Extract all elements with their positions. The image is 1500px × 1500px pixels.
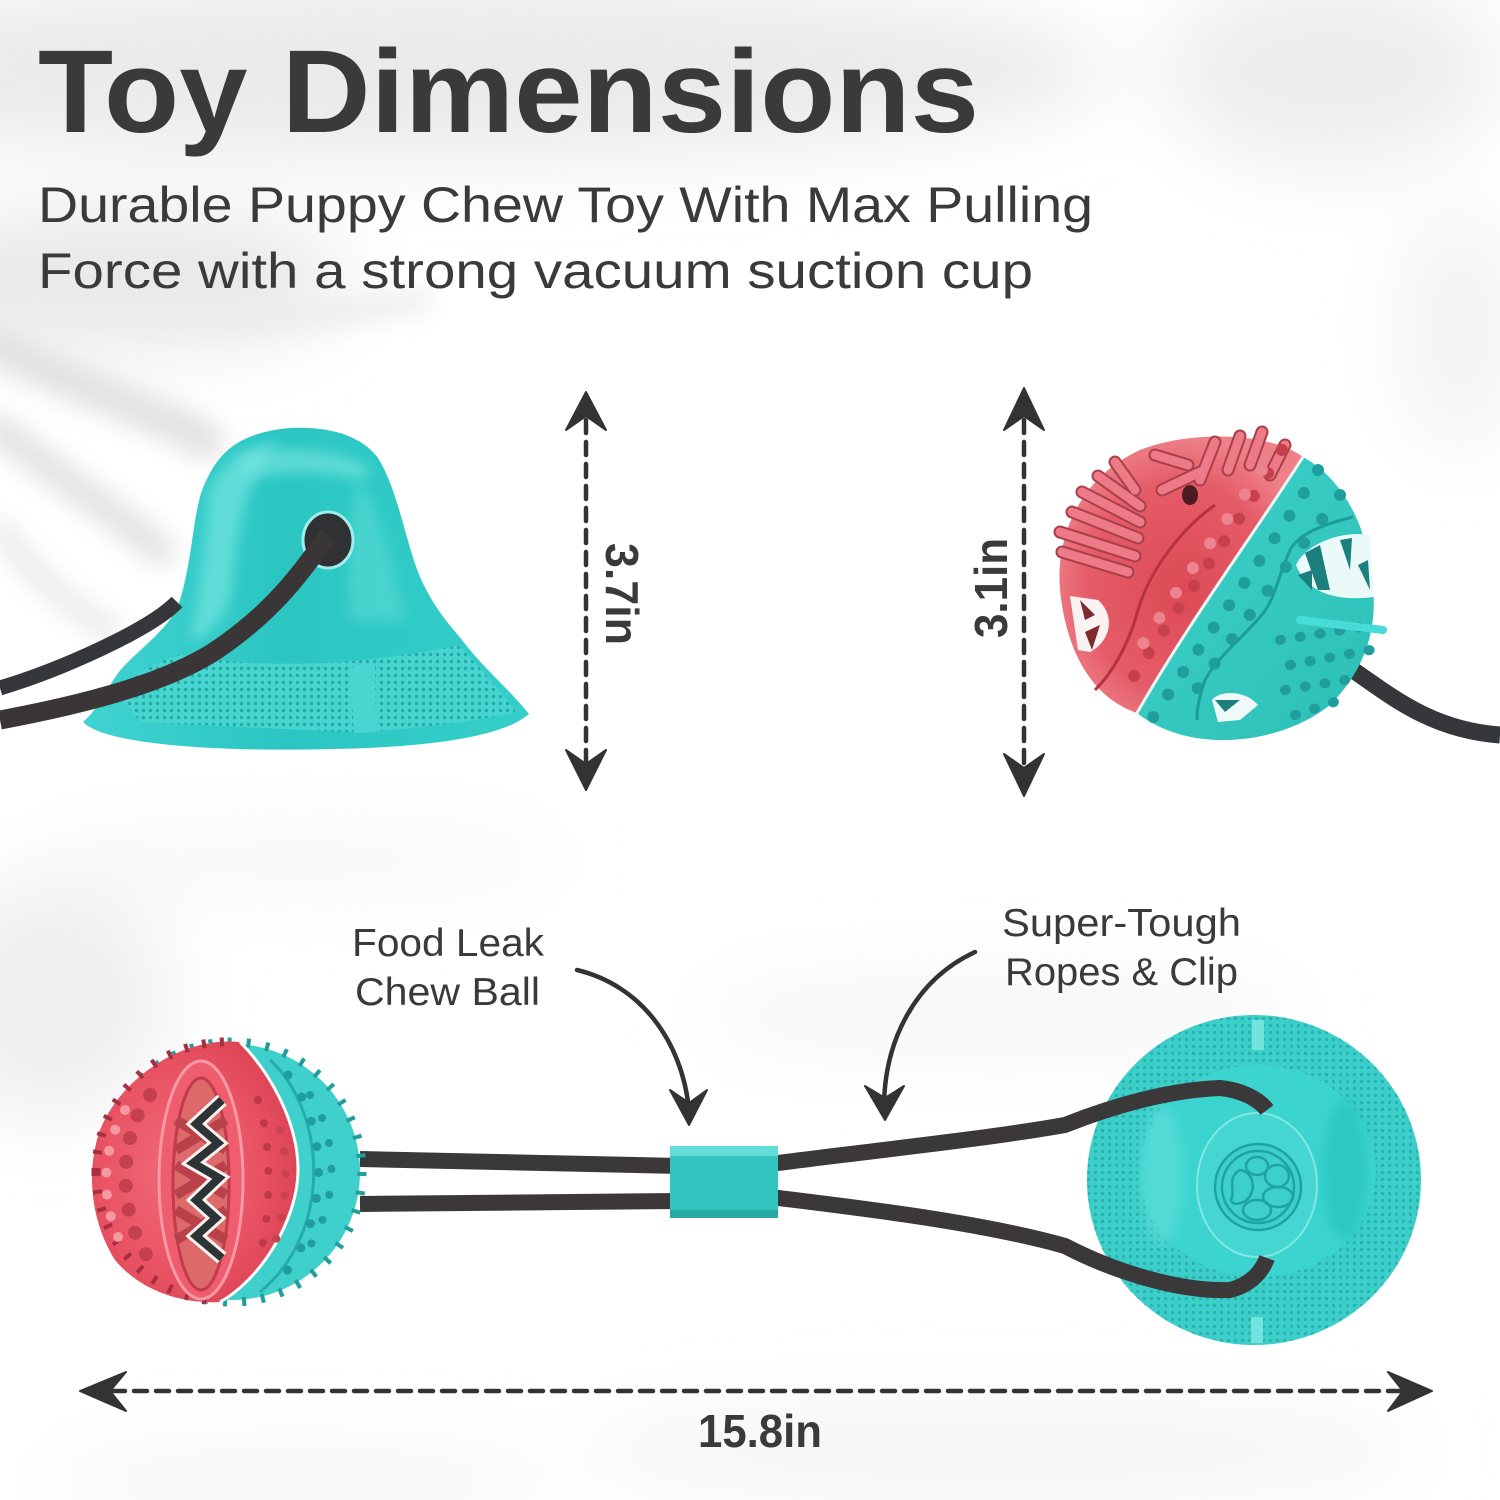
label 3.7in: 3.7in [596, 543, 648, 645]
teal bumps [1150, 470, 1340, 722]
clip [670, 1146, 778, 1218]
slot [159, 1061, 243, 1299]
red ridge [1095, 505, 1215, 690]
toy top view [92, 1015, 1421, 1345]
chew ball front [92, 1041, 362, 1302]
dotted base band [117, 645, 516, 732]
teal ridge [1197, 517, 1353, 720]
split highlight [1137, 457, 1303, 713]
chew ball side view [1059, 432, 1500, 740]
red half [1059, 436, 1303, 713]
ropes [0, 602, 177, 688]
teal back half [104, 1044, 360, 1300]
red spikes [106, 1095, 286, 1260]
label 15.8in: 15.8in [698, 1405, 822, 1457]
curved arrow to ropes [865, 952, 975, 1120]
subtitle: Durable Puppy Chew Toy With Max Pulling [38, 177, 1093, 233]
red front half [92, 1041, 298, 1302]
suction disc [1087, 1015, 1421, 1345]
title: Toy Dimensions [38, 26, 979, 158]
label: food leak chew ball [352, 922, 545, 1014]
right opening [1296, 534, 1374, 598]
height arrow 3.7in [566, 392, 606, 790]
label: super-tough ropes and clip: Super-Tough [1002, 902, 1241, 945]
label: super-tough ropes and clip: Ropes & Clip [1005, 951, 1238, 994]
paw emblem [1215, 1144, 1301, 1230]
label 3.1in: 3.1in [965, 538, 1017, 638]
subtitle: Force with a strong vacuum suction cup [38, 243, 1033, 299]
ropes [360, 1088, 1267, 1290]
teal half [1137, 457, 1374, 740]
subtitle [38, 177, 1093, 299]
teal spiky cluster [1280, 620, 1383, 715]
left opening [1070, 596, 1109, 652]
zigzag teeth [193, 1100, 222, 1258]
red spiky tuft [1060, 432, 1285, 572]
rope [1350, 668, 1500, 735]
label: super-tough ropes and clip [1002, 902, 1241, 994]
bottom opening [1212, 693, 1258, 722]
label: food leak chew ball: Chew Ball [355, 971, 540, 1014]
red bumps [1122, 450, 1282, 695]
height arrow 3.1in [1004, 388, 1044, 796]
suction cup side view [0, 428, 529, 750]
label: food leak chew ball: Food Leak [352, 922, 545, 965]
curved arrow to clip [577, 970, 707, 1125]
width arrow 15.8in [80, 1372, 1432, 1411]
